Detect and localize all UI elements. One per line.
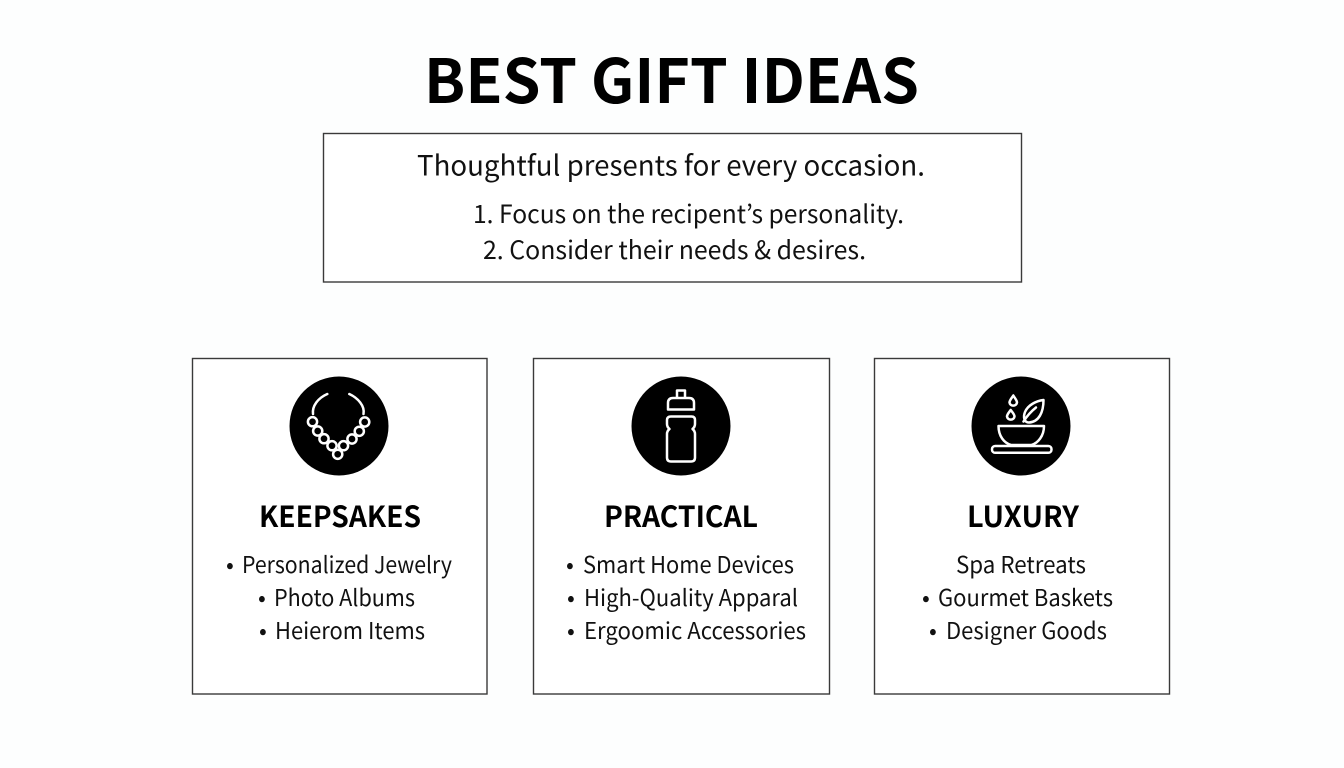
practical list: Ergoomic Accessories: [584, 612, 806, 646]
panel: practical: [534, 358, 830, 694]
luxury list: Spa Retreats: [956, 546, 1086, 580]
practical list: •: [567, 612, 575, 646]
keepsakes list: •: [226, 546, 234, 580]
luxury list: [922, 546, 1113, 646]
keepsakes card: [192, 358, 487, 694]
panel: introduction: [324, 134, 1022, 282]
keepsakes list: Personalized Jewelry: [242, 546, 452, 580]
luxury list: •: [922, 579, 930, 613]
icon: spa bowl and leaf: [972, 376, 1070, 476]
intro point 1: 1. Focus on the recipent’s personality.: [473, 195, 904, 231]
intro heading: Thoughtful presents for every occasion.: [417, 144, 925, 184]
keepsakes list: Photo Albums: [274, 579, 415, 613]
panel: keepsakes: [192, 358, 487, 694]
panel: luxury: [874, 358, 1170, 694]
luxury list: •: [929, 612, 937, 646]
keepsakes list: •: [259, 612, 267, 646]
practical list: •: [567, 579, 575, 613]
luxury card: [874, 358, 1170, 694]
keepsakes heading: KEEPSAKES: [259, 494, 421, 536]
practical list: •: [566, 546, 574, 580]
intro box: [324, 134, 1022, 282]
title: BEST GIFT IDEAS: [424, 32, 919, 121]
luxury heading: LUXURY: [967, 494, 1080, 536]
luxury list: Designer Goods: [946, 612, 1107, 646]
practical heading: PRACTICAL: [604, 494, 758, 536]
keepsakes list: Heierom Items: [275, 612, 425, 646]
practical card: [534, 358, 830, 694]
practical list: High-Quality Apparal: [584, 579, 798, 613]
keepsakes list: [226, 546, 452, 646]
practical list: Smart Home Devices: [583, 546, 794, 580]
icon: water bottle: [632, 376, 730, 476]
practical list: [566, 546, 806, 646]
intro point 2: 2. Consider their needs & desires.: [483, 231, 866, 267]
keepsakes list: •: [258, 579, 266, 613]
icon: necklace: [290, 376, 388, 476]
luxury list: Gourmet Baskets: [938, 579, 1113, 613]
